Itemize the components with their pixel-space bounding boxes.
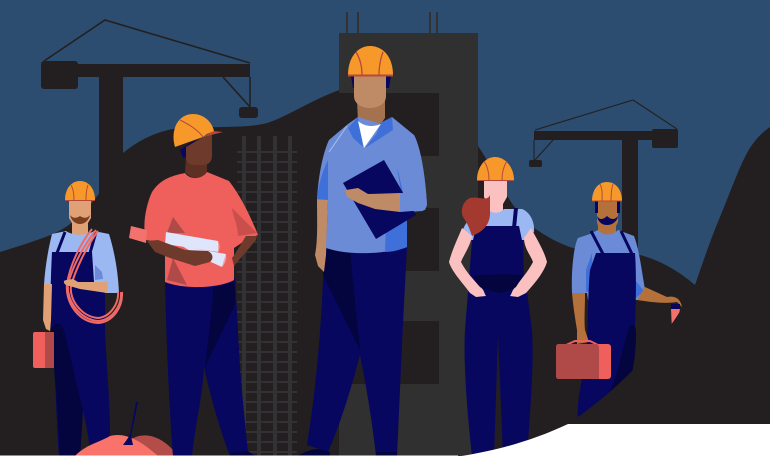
dark hill silhouette <box>0 88 770 456</box>
toolbox <box>556 341 611 379</box>
hair <box>462 195 490 236</box>
sleeve shade <box>317 160 328 200</box>
central building with windows <box>339 12 478 456</box>
shirt <box>44 231 119 293</box>
right forearm <box>232 236 257 266</box>
arms <box>449 228 547 297</box>
overalls shade <box>606 324 636 398</box>
left arm <box>315 200 328 272</box>
shirt highlight line <box>329 126 347 152</box>
worker 1: man with rope and toolbox <box>33 181 122 456</box>
face <box>186 134 212 165</box>
boots <box>297 449 397 456</box>
helmet <box>348 46 393 76</box>
neck and face <box>69 200 91 239</box>
rope coil <box>67 229 122 323</box>
legs shade <box>323 248 360 350</box>
face <box>354 76 386 108</box>
worker 2: man in red shirt with blueprints <box>129 114 258 456</box>
legs <box>307 247 407 456</box>
shirt <box>144 172 258 287</box>
worker 5: bearded worker with toolbox <box>556 182 682 418</box>
collar <box>348 117 393 148</box>
shirt <box>462 209 534 240</box>
belt <box>474 274 522 293</box>
bib <box>472 226 523 245</box>
cuff <box>129 226 147 243</box>
neck and face <box>484 181 507 215</box>
beard <box>595 201 620 225</box>
legs shade <box>205 282 235 367</box>
worker 3: central man with clipboard <box>297 46 427 456</box>
undershirt <box>358 121 381 148</box>
white curved foreground <box>0 424 770 464</box>
right tower crane <box>529 100 678 248</box>
foreground slope repeat over worker legs <box>568 285 720 424</box>
blueprint rolls <box>165 232 226 267</box>
shirt shade <box>167 258 187 285</box>
neck and face <box>597 201 618 240</box>
helmet <box>174 114 223 147</box>
handheld tool <box>671 304 680 330</box>
hair <box>180 140 195 158</box>
left arm <box>43 284 52 331</box>
scaffold grid <box>237 136 297 456</box>
arms <box>572 287 682 344</box>
overalls <box>50 252 110 456</box>
toolbox <box>33 332 54 368</box>
forearm <box>64 279 108 293</box>
left forearm <box>147 240 212 266</box>
left tower crane <box>41 20 258 260</box>
helmet <box>477 157 514 180</box>
shirt <box>317 117 427 253</box>
clipboard <box>343 160 416 239</box>
beard <box>70 215 90 224</box>
helmet <box>592 182 622 201</box>
foreground dark slope on right <box>568 127 770 424</box>
hair <box>351 76 391 88</box>
worker 4: woman with hands on hips <box>449 157 547 456</box>
helmet <box>65 181 95 200</box>
lower blue panel and side shade <box>385 212 407 252</box>
boot <box>230 451 255 456</box>
sleeve fold <box>95 265 103 280</box>
legs <box>465 240 533 456</box>
shirt <box>572 230 646 300</box>
overalls <box>578 253 636 418</box>
sleeve <box>398 135 427 212</box>
neck <box>185 158 207 178</box>
forearm <box>346 188 400 212</box>
neck <box>357 100 385 125</box>
overalls shade <box>51 324 83 456</box>
pile of material with trowel <box>75 402 173 456</box>
legs <box>165 278 248 456</box>
